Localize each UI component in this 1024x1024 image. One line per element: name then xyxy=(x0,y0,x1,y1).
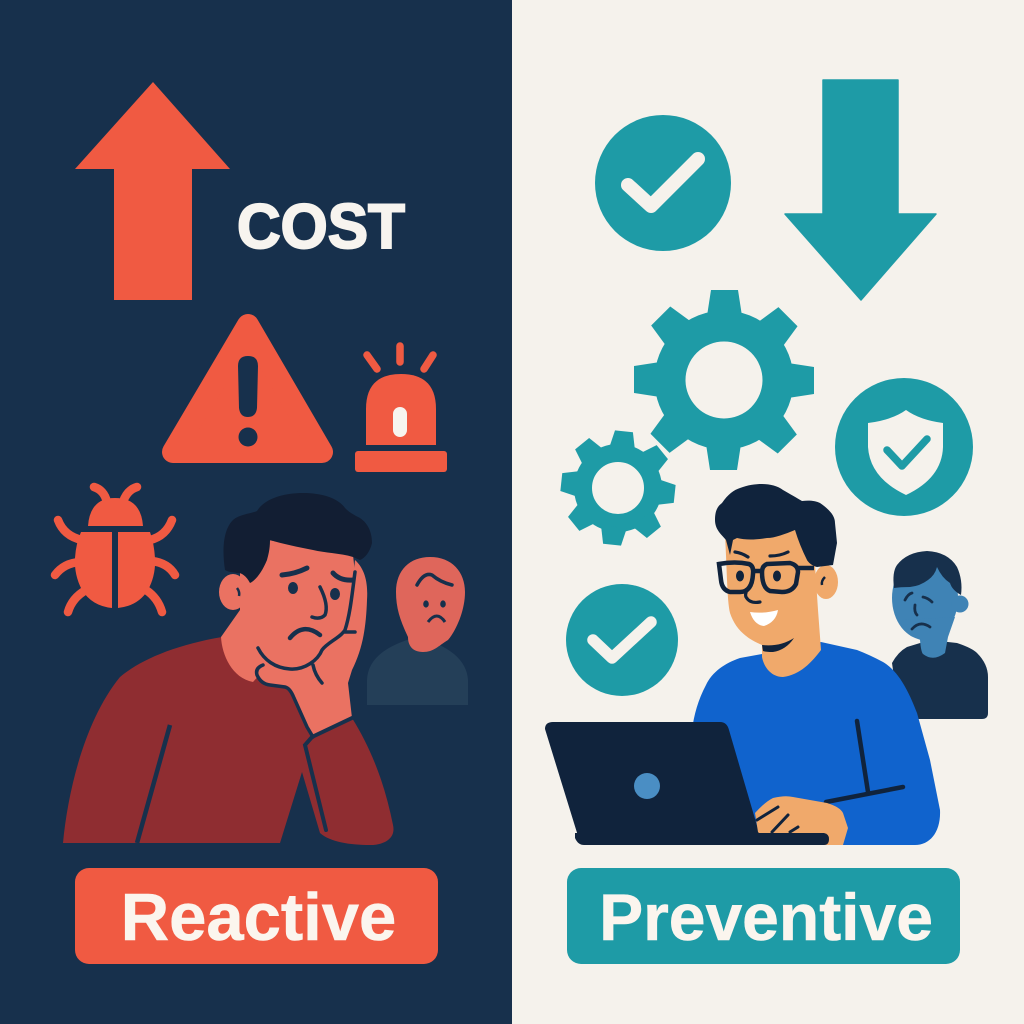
sweater xyxy=(692,642,940,845)
hair xyxy=(224,493,372,583)
figure: background worried person xyxy=(367,557,468,705)
face details xyxy=(137,568,355,843)
panel: reactive background xyxy=(0,0,512,1024)
smile xyxy=(750,610,778,626)
hand xyxy=(755,796,848,845)
panel: preventive background xyxy=(512,0,1024,1024)
icon: small gear xyxy=(560,430,676,546)
icon: cost down arrow xyxy=(785,80,936,300)
laptop base xyxy=(575,833,829,845)
figure: background sad person xyxy=(892,551,988,719)
icon: warning triangle xyxy=(173,325,322,452)
laptop screen xyxy=(545,722,760,836)
icon: bug xyxy=(55,487,175,612)
hair xyxy=(715,484,837,567)
label: Preventive: Preventive xyxy=(599,880,933,954)
sweater lines xyxy=(826,721,903,802)
hand xyxy=(257,560,367,737)
label: Reactive: Reactive xyxy=(121,880,396,955)
ear xyxy=(814,565,838,599)
icon: lower check circle xyxy=(566,584,678,696)
icon: large gear xyxy=(634,290,814,470)
brows and nose xyxy=(735,552,788,602)
chin shadow xyxy=(762,638,794,652)
face and neck xyxy=(221,535,358,682)
icon: siren alarm xyxy=(355,346,447,472)
label: Preventive xyxy=(567,868,960,964)
sweater xyxy=(63,637,393,845)
ear xyxy=(219,574,247,610)
icon: cost up arrow xyxy=(75,82,230,300)
neck and face xyxy=(725,530,821,677)
icon: top check circle xyxy=(595,115,731,251)
label: Reactive xyxy=(75,868,438,964)
glasses xyxy=(719,562,814,592)
heading: COST: COST xyxy=(237,192,405,262)
icon: shield check circle xyxy=(835,378,973,516)
figure: happy person with laptop xyxy=(545,484,940,845)
figure: stressed person xyxy=(63,493,393,845)
